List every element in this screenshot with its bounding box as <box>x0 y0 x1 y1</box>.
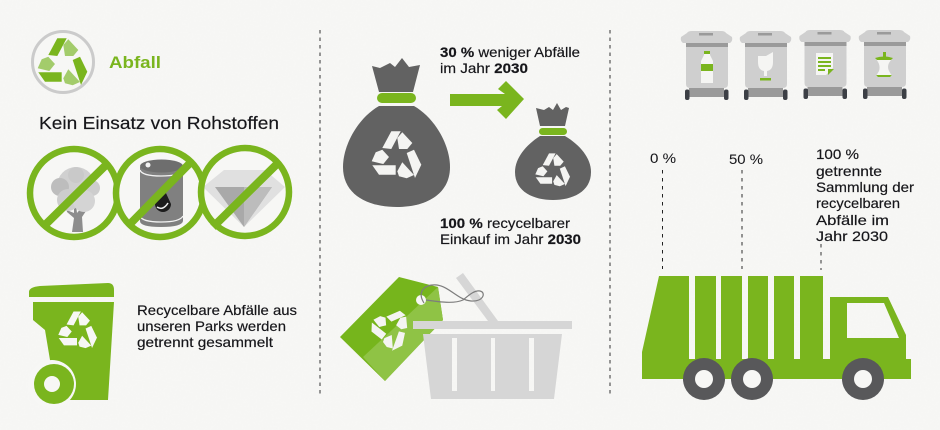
icon: no diamonds <box>201 148 289 236</box>
dashed column divider left <box>319 30 321 395</box>
text: 30 percent less waste <box>440 44 580 76</box>
icon: no trees <box>30 149 118 237</box>
icon: no oil <box>116 149 204 237</box>
text: 100 percent recyclable shopping: 100 % recycelbarer <box>440 215 570 231</box>
text: recyclable park waste: unseren Parks werden <box>137 318 286 334</box>
basket body <box>423 334 562 399</box>
label: 100 percent separate collection: getrennte <box>816 163 882 179</box>
panel: waste reduction <box>340 44 591 399</box>
recycling price tag <box>340 277 443 381</box>
label: 100 percent separate collection: 100 % <box>816 146 859 162</box>
icon: large garbage bag <box>343 58 450 207</box>
label: 50 percent: 50 % <box>729 151 763 167</box>
icon: paper bin <box>799 30 851 99</box>
panel: raw materials <box>28 32 297 408</box>
heading: Abfall: Abfall <box>109 53 161 72</box>
label: 100 percent separate collection: Sammlung der <box>816 179 914 195</box>
label: 100 percent separate collection: Jahr 2030 <box>816 228 888 244</box>
icon: apple core bin <box>859 30 910 99</box>
label: 100 percent separate collection: recycelbaren <box>816 195 900 211</box>
dashed column divider right <box>609 30 611 395</box>
label: 100 percent separate collection: Abfälle im <box>816 212 889 228</box>
icon: green wheelie bin <box>28 283 114 408</box>
icon: bottle bin <box>681 31 732 100</box>
panel: separate collection <box>642 30 914 400</box>
tag string <box>421 285 483 303</box>
text: 100 percent recyclable shopping <box>440 215 581 247</box>
basket rim <box>413 321 572 329</box>
arrow: reduction <box>450 81 524 119</box>
text: recyclable park waste: Recycelbare Abfälle aus <box>137 302 297 318</box>
icon: small garbage bag <box>515 103 591 200</box>
text: 100 percent recyclable shopping: Einkauf im Jahr 2030 <box>440 231 581 247</box>
heading: no raw materials: Kein Einsatz von Rohstoffen <box>39 113 279 133</box>
basket handle <box>456 273 498 321</box>
text: 30 percent less waste: im Jahr 2030 <box>440 60 528 76</box>
label: 0 percent: 0 % <box>650 150 676 166</box>
icon: recycling badge <box>32 32 94 92</box>
label: 100 percent separate collection <box>816 146 914 244</box>
text: 30 percent less waste: 30 % weniger Abfälle <box>440 44 580 60</box>
icon: glass bin <box>740 31 791 100</box>
icon: shopping basket with tag <box>340 273 572 399</box>
text: recyclable park waste <box>137 302 297 350</box>
text: recyclable park waste: getrennt gesammelt <box>137 334 273 350</box>
icon: garbage truck <box>642 276 911 400</box>
